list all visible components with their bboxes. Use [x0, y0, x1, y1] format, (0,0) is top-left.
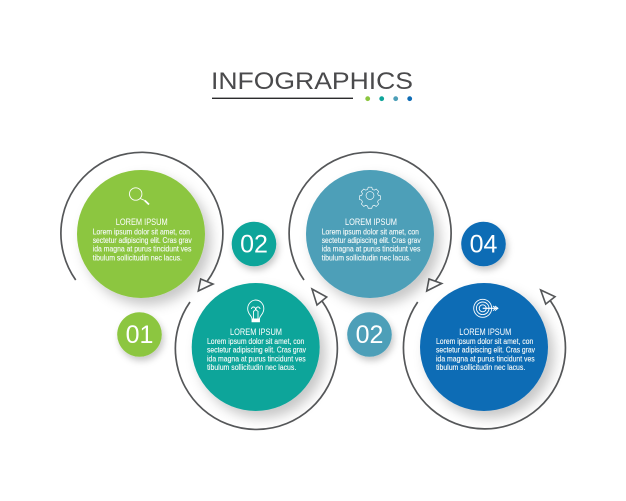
- text block 1: ida magna at purus tincidunt ves: [93, 244, 191, 254]
- badge 04: 04: [470, 230, 497, 258]
- badge 04: [461, 222, 506, 266]
- text block 2: ida magna at purus tincidunt ves: [207, 353, 306, 363]
- title colour dots: [365, 96, 412, 101]
- panel: step 3 steel blue circle: [289, 152, 451, 298]
- icon: light bulb: [248, 300, 264, 322]
- ring arrow 4: [403, 290, 565, 429]
- icon: magnifier: [130, 188, 149, 204]
- panel: step 4 blue circle: [403, 283, 565, 429]
- badge 02 steel blue: 02: [356, 321, 383, 349]
- title underline: [212, 98, 353, 99]
- heading 3: LOREM IPSUM: [345, 217, 397, 227]
- text block 1: Lorem ipsum dolor sit amet, con: [93, 226, 190, 236]
- badge 02 teal: [232, 222, 276, 266]
- text block 1: sectetur adipiscing elit. Cras grav: [93, 235, 192, 245]
- text block 3: Lorem ipsum dolor sit amet, con: [322, 226, 419, 236]
- badge 01: [117, 312, 162, 357]
- blue disc: [420, 283, 548, 411]
- badge 02 teal: 02: [240, 230, 268, 258]
- text block 4: tibulum sollicitudin nec lacus.: [436, 362, 525, 372]
- icon: gear: [359, 187, 381, 208]
- text block 1: tibulum sollicitudin nec lacus.: [93, 252, 182, 262]
- text block 4: Lorem ipsum dolor sit amet, con: [436, 336, 534, 346]
- text block 2: Lorem ipsum dolor sit amet, con: [207, 336, 305, 346]
- text block 4: ida magna at purus tincidunt ves: [436, 353, 535, 363]
- text block 4: [436, 336, 536, 372]
- text block 2: tibulum sollicitudin nec lacus.: [207, 362, 296, 372]
- teal disc: [192, 283, 320, 411]
- ring arrow 1: [61, 152, 223, 291]
- badge 01: 01: [126, 321, 153, 349]
- panel: step 1 green circle: [61, 152, 223, 298]
- panel: step 2 teal circle: [175, 283, 337, 429]
- text block 3: tibulum sollicitudin nec lacus.: [322, 252, 411, 262]
- text block 2: [207, 336, 307, 372]
- text block 4: sectetur adipiscing elit. Cras grav: [436, 345, 536, 355]
- text block 2: sectetur adipiscing elit. Cras grav: [207, 345, 307, 355]
- text block 3: sectetur adipiscing elit. Cras grav: [322, 235, 421, 245]
- ring arrow 2: [175, 289, 337, 429]
- title: INFOGRAPHICS: [211, 68, 413, 95]
- text block 3: [322, 226, 421, 262]
- text block 1: [93, 226, 192, 262]
- heading 1: LOREM IPSUM: [116, 217, 168, 227]
- badge 02 steel blue: [347, 312, 392, 357]
- heading 4: LOREM IPSUM: [459, 327, 511, 337]
- ring arrow 3: [289, 152, 451, 291]
- steel blue disc: [306, 170, 434, 298]
- icon: target: [474, 299, 498, 317]
- text block 3: ida magna at purus tincidunt ves: [322, 244, 420, 254]
- heading 2: LOREM IPSUM: [230, 327, 282, 337]
- green disc: [77, 170, 205, 298]
